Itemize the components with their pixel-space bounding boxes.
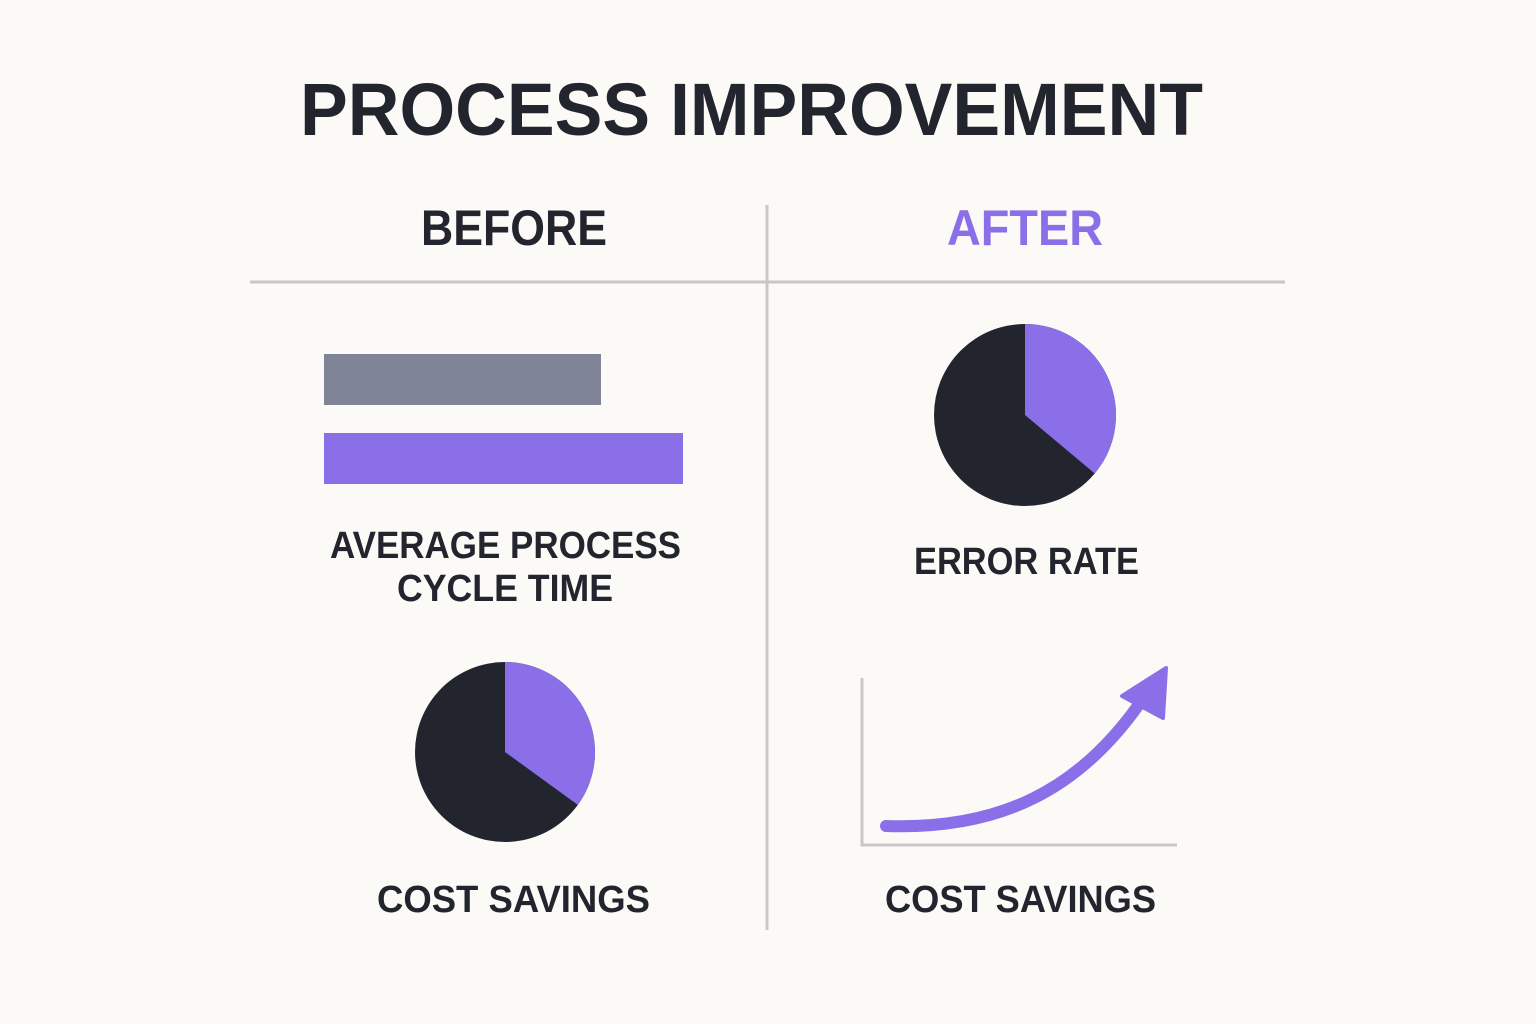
title: PROCESS IMPROVEMENT (300, 68, 1203, 151)
arrow: rising curve (886, 668, 1166, 826)
label: cost savings before: COST SAVINGS (377, 879, 650, 921)
line chart: cost savings after (862, 668, 1177, 845)
label: error rate: ERROR RATE (914, 541, 1139, 583)
label: average process cycle time (330, 525, 681, 610)
label: cost savings after: COST SAVINGS (885, 879, 1156, 921)
pie chart: cost savings before (415, 662, 595, 842)
heading: after: AFTER (947, 200, 1103, 256)
heading: before: BEFORE (421, 200, 607, 256)
pie chart: error rate (934, 324, 1116, 506)
bar chart: cycle time (324, 354, 683, 484)
label: average process cycle time: AVERAGE PROCESS (330, 525, 681, 567)
label: average process cycle time: CYCLE TIME (397, 568, 613, 610)
